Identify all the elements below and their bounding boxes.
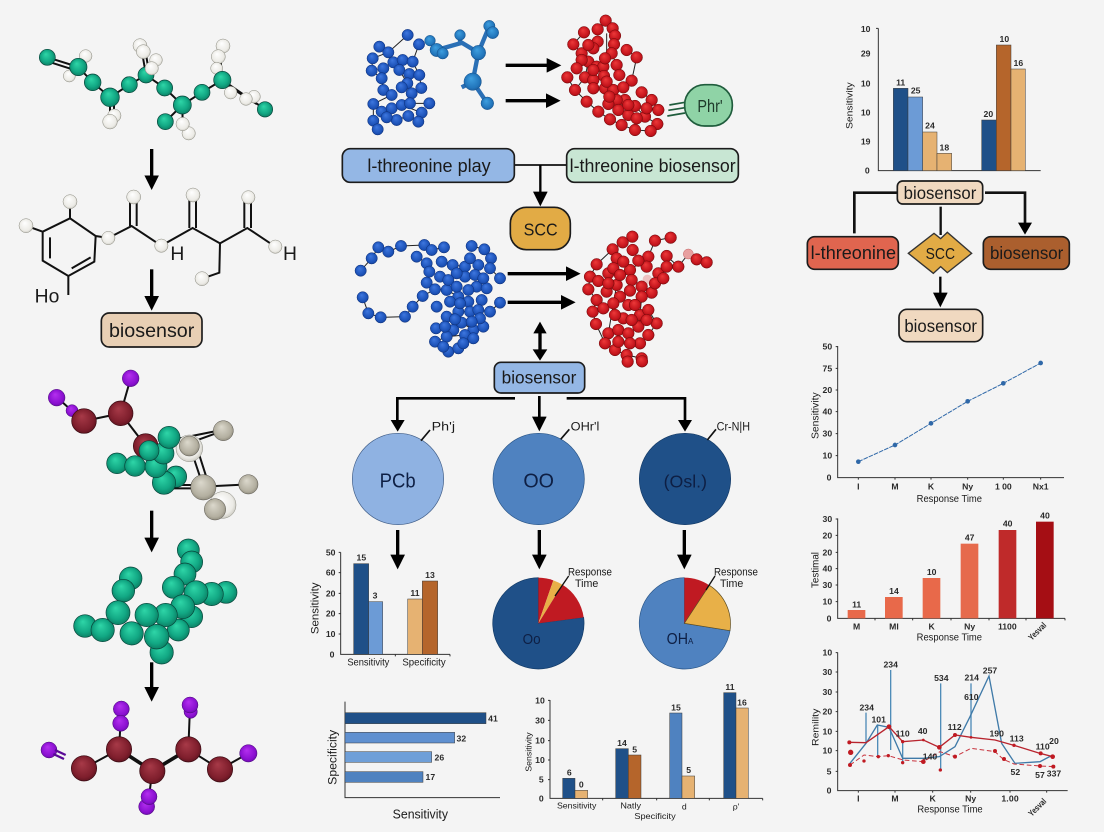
bar chart: top right: Sensitivity [844,82,854,129]
line chart: sensitivity over response time: 10 [823,451,832,461]
grouped bar chart: ρ' [733,801,740,811]
grouped bar chart: 5 [632,744,637,754]
bar chart: red: M [853,621,860,631]
centre column [310,15,763,821]
line chart: sensitivity over response time: M [891,482,899,492]
label: Phr badge [667,85,732,126]
label: biosensor (blue) [494,362,585,393]
pie chart: OHA [639,566,758,669]
line chart: sensitivity over response time: I [857,482,860,492]
grouped bar chart: 5 [539,775,544,785]
bar chart: red [810,511,1065,644]
bar chart: sensitivity and specificity: 13 [425,570,435,580]
line chart: sensitivity over response time: 50 [823,342,832,352]
horizontal bar chart: 41 [488,713,498,723]
line chart: sensitivity over response time: K [928,482,935,492]
bar chart: red: 47 [965,532,975,542]
bar chart: red: 40 [1040,511,1050,521]
line chart: multi-series with spikes: Remility [810,708,820,746]
line chart: multi-series with spikes: 5 [827,766,832,776]
bar chart: sensitivity and specificity: 20 [326,609,336,619]
bar chart: red: 11 [852,599,861,609]
structural formula [19,188,297,308]
arrow [508,297,568,307]
label: l-threonine play: l-threonine play [367,155,491,176]
label: l-threonine biosensor [567,149,738,182]
bar chart: top right: 10 [861,78,871,88]
bar chart: sensitivity and specificity: 15 [357,553,366,563]
bar chart: sensitivity and specificity: Sensitivity [347,658,389,669]
right column [807,24,1069,818]
bar chart: top right: 16 [1014,58,1023,68]
bar chart: top right: 20 [984,109,993,119]
flow connectors and arrows [854,193,1032,235]
bar chart: red: 20 [823,547,832,557]
line chart: multi-series with spikes: 40 [918,726,928,736]
line chart: multi-series with spikes: 30 [823,687,832,697]
pie chart: OHA: OHA [667,631,694,648]
label: biosensor (brown) [983,237,1069,269]
pie chart: Oo: Response [568,566,612,578]
bar chart: top right: 25 [911,86,921,96]
line chart: multi-series with spikes: K [930,793,937,803]
bar chart: red: Ml [889,621,899,631]
bar chart: red: Response Time [917,633,982,644]
line chart: multi-series with spikes: 234 [883,660,898,670]
arrow [147,662,157,694]
label: biosensor (bottom): biosensor [904,316,977,336]
line chart: sensitivity over response time: Sensitivity [810,392,821,439]
circle: (Osl.): Cr-N|H [717,420,750,434]
label: l-threonine play [342,149,514,182]
grouped bar chart: 15 [671,702,681,712]
horizontal bar chart [326,702,500,821]
structural formula: H [283,244,297,265]
tree connector lines [397,398,685,425]
line chart: multi-series with spikes: Yesval [1026,796,1048,818]
label: biosensor (top): biosensor [904,183,976,203]
circle: (Osl.) [639,420,750,525]
grouped bar chart: 30 [535,715,545,725]
bar chart: top right: 10 [1000,34,1009,44]
label: biosensor (blue): biosensor [502,367,576,387]
line chart: multi-series with spikes: 257 [983,665,997,675]
label: SCC [510,207,570,250]
bar chart: top right: 0 [865,166,870,176]
label: Phr badge: Phr' [697,96,723,116]
line chart: multi-series with spikes: 113 [1010,734,1024,744]
line chart: multi-series with spikes: 140 [923,751,937,761]
circle: PCb: PCb [380,471,416,493]
bar chart: top right: 10 [861,24,871,34]
line chart: multi-series with spikes: 112 [948,722,962,732]
arrow [147,511,157,545]
bar chart: sensitivity and specificity [310,547,450,669]
line chart: sensitivity over response time: Nx1 [1033,482,1049,492]
bar chart: red: 30 [823,514,832,524]
bar chart: red: 14 [889,586,899,596]
label: SCC: SCC [524,219,558,239]
structural formula: Ho [35,287,59,308]
circle: PCb [352,420,455,525]
molecule: blue cluster, top [366,20,499,135]
molecule: purple, maroon, teal and grey cluster [48,370,258,520]
bar chart: top right: 18 [940,142,949,152]
line chart: sensitivity over response time [810,342,1064,505]
label: biosensor: biosensor [109,321,195,342]
circle: OO: OO [523,471,554,493]
bar chart: red: K [929,621,936,631]
label: biosensor [101,313,202,347]
bar chart: red: Yesval [1026,620,1048,642]
label: l-threonine biosensor: l-threonine biosensor [570,155,736,176]
arrows into circles [391,396,692,432]
line chart: sensitivity over response time: 20 [823,385,832,395]
line chart: multi-series with spikes: 110 [1036,741,1050,751]
grouped bar chart: d [682,801,687,811]
line chart: multi-series with spikes [810,648,1068,818]
line chart: multi-series with spikes: 10 [823,726,832,736]
label: biosensor (bottom) [899,309,983,342]
line chart: multi-series with spikes: 190 [989,729,1004,739]
bar chart: red: 0 [827,613,832,623]
line chart: multi-series with spikes: I [857,793,860,803]
bar chart: top right: 24 [925,121,935,131]
circle: PCb: Ph'j [432,420,455,434]
bar chart: top right: 29 [861,48,871,58]
line chart: multi-series with spikes: 20 [823,707,832,717]
line chart: multi-series with spikes: 337 [1047,769,1061,779]
bar chart: red: Testimal [810,552,821,588]
bar chart: sensitivity and specificity: Sensitivity [310,582,322,634]
grouped bar chart: 11 [725,682,735,692]
arrow [506,60,554,70]
line chart: sensitivity over response time: 40 [823,407,832,417]
line chart: multi-series with spikes: 110 [896,729,910,739]
line chart: sensitivity over response time: Ny [962,482,973,492]
line chart: multi-series with spikes: 1.00 [1001,793,1019,803]
line chart: multi-series with spikes: M [891,793,899,803]
line chart: multi-series with spikes: 30 [823,667,832,677]
line chart: multi-series with spikes: 20 [1049,736,1059,746]
line chart: sensitivity over response time: 30 [823,429,832,439]
bar chart: sensitivity and specificity: 3 [373,591,378,601]
bar chart: top right: 19 [861,136,871,146]
arrow [506,96,553,106]
pie chart: OHA: Time [720,578,743,590]
pie chart: OHA: Response [714,566,758,578]
bar chart: red: Ny [964,621,975,631]
bar chart: sensitivity and specificity: 11 [410,588,420,598]
circle: (Osl.): (Osl.) [664,472,707,492]
arrow [508,269,573,279]
bar chart: sensitivity and specificity: Specificity [402,658,446,669]
horizontal bar chart: 32 [457,733,466,743]
grouped bar chart: 6 [567,768,572,778]
circle: OO [493,420,599,525]
bar chart: sensitivity and specificity: 0 [330,649,335,659]
line chart: multi-series with spikes: 234 [859,703,874,713]
molecule: red cluster, top [561,15,664,137]
grouped bar chart: 0 [579,779,584,789]
line chart: multi-series with spikes: 610 [964,692,979,702]
line chart: sensitivity over response time: 0 [827,473,832,483]
grouped bar chart: Sensitivity [524,732,534,772]
grouped bar chart: 10 [535,736,545,746]
horizontal bar chart: Sensitivity [393,807,449,821]
diamond: SCC [908,232,972,273]
line chart: multi-series with spikes: 10 [823,746,832,756]
line chart: multi-series with spikes: 0 [827,786,832,796]
grouped bar chart: Specificity [634,811,676,821]
bar chart: sensitivity and specificity: 10 [326,629,336,639]
label: l-threonine (red) [807,237,898,269]
line chart: multi-series with spikes: 57 [1035,770,1045,780]
bar chart: red: 10 [927,567,937,577]
arrow [393,530,403,562]
grouped bar chart: Natly [620,801,642,811]
line chart: multi-series with spikes: 534 [934,673,949,683]
structural formula: H [170,244,184,265]
grouped bar chart: 5 [686,765,691,775]
bar chart: red: 40 [1003,519,1013,529]
arrow [147,269,157,303]
horizontal bar chart: Specificity [326,729,340,785]
molecule: red cluster, lower [582,231,712,367]
bar chart: sensitivity and specificity: 50 [326,547,336,557]
grouped bar chart: 14 [617,738,627,748]
line chart: sensitivity over response time: 75 [823,363,832,373]
grouped bar chart: 10 [535,755,545,765]
label: l-threonine (red): l-threonine [811,242,896,263]
pie chart: Oo: Time [575,578,598,590]
bar chart: red: 40 [823,564,832,574]
arrow [937,277,944,300]
pie chart: Oo: Oo [523,632,541,648]
bar chart: top right: 10 [861,107,871,117]
bar chart: red: 1100 [998,621,1017,631]
grouped bar chart: 10 [535,695,545,705]
line chart: sensitivity over response time: Response Time [917,494,982,505]
diamond: SCC: SCC [926,246,955,263]
pie chart: Oo [493,566,612,669]
molecule: blue cluster, lower [355,239,506,357]
line chart: multi-series with spikes: 214 [964,673,979,683]
bar chart: red: 10 [823,597,832,607]
line chart: multi-series with spikes: Response Time [917,805,983,816]
horizontal bar chart: 17 [426,772,435,782]
connector between label boxes [514,165,567,199]
molecule: teal atom cluster [74,539,237,664]
molecule: teal and white ball-and-stick chain [39,39,273,140]
bar chart: red: 30 [823,580,832,590]
grouped bar chart: Sensitivity [557,801,597,811]
molecule: maroon and purple chain [41,697,257,815]
line chart: multi-series with spikes: 101 [871,715,886,725]
horizontal bar chart: 26 [435,752,444,762]
grouped bar chart [524,682,763,821]
line chart: multi-series with spikes: Ny [965,793,976,803]
line chart: sensitivity over response time: 1 00 [995,482,1012,492]
line chart: multi-series with spikes: 10 [823,648,832,658]
bar chart: red: 20 [823,530,832,540]
line chart: multi-series with spikes: 52 [1011,767,1020,777]
grouped bar chart: 0 [539,793,544,803]
bar chart: sensitivity and specificity: 20 [326,588,336,598]
bar chart: top right [844,24,1041,176]
arrow [147,149,157,183]
arrow [534,530,544,562]
arrow [679,530,689,562]
bar chart: top right: 11 [896,77,905,87]
label: biosensor (brown): biosensor [990,243,1063,263]
grouped bar chart: 16 [737,697,747,707]
double arrow [533,322,547,361]
bar chart: sensitivity and specificity: 60 [326,568,336,578]
circle: OO: OHr'l [571,420,599,434]
left column: molecules and biosensor [19,39,297,815]
